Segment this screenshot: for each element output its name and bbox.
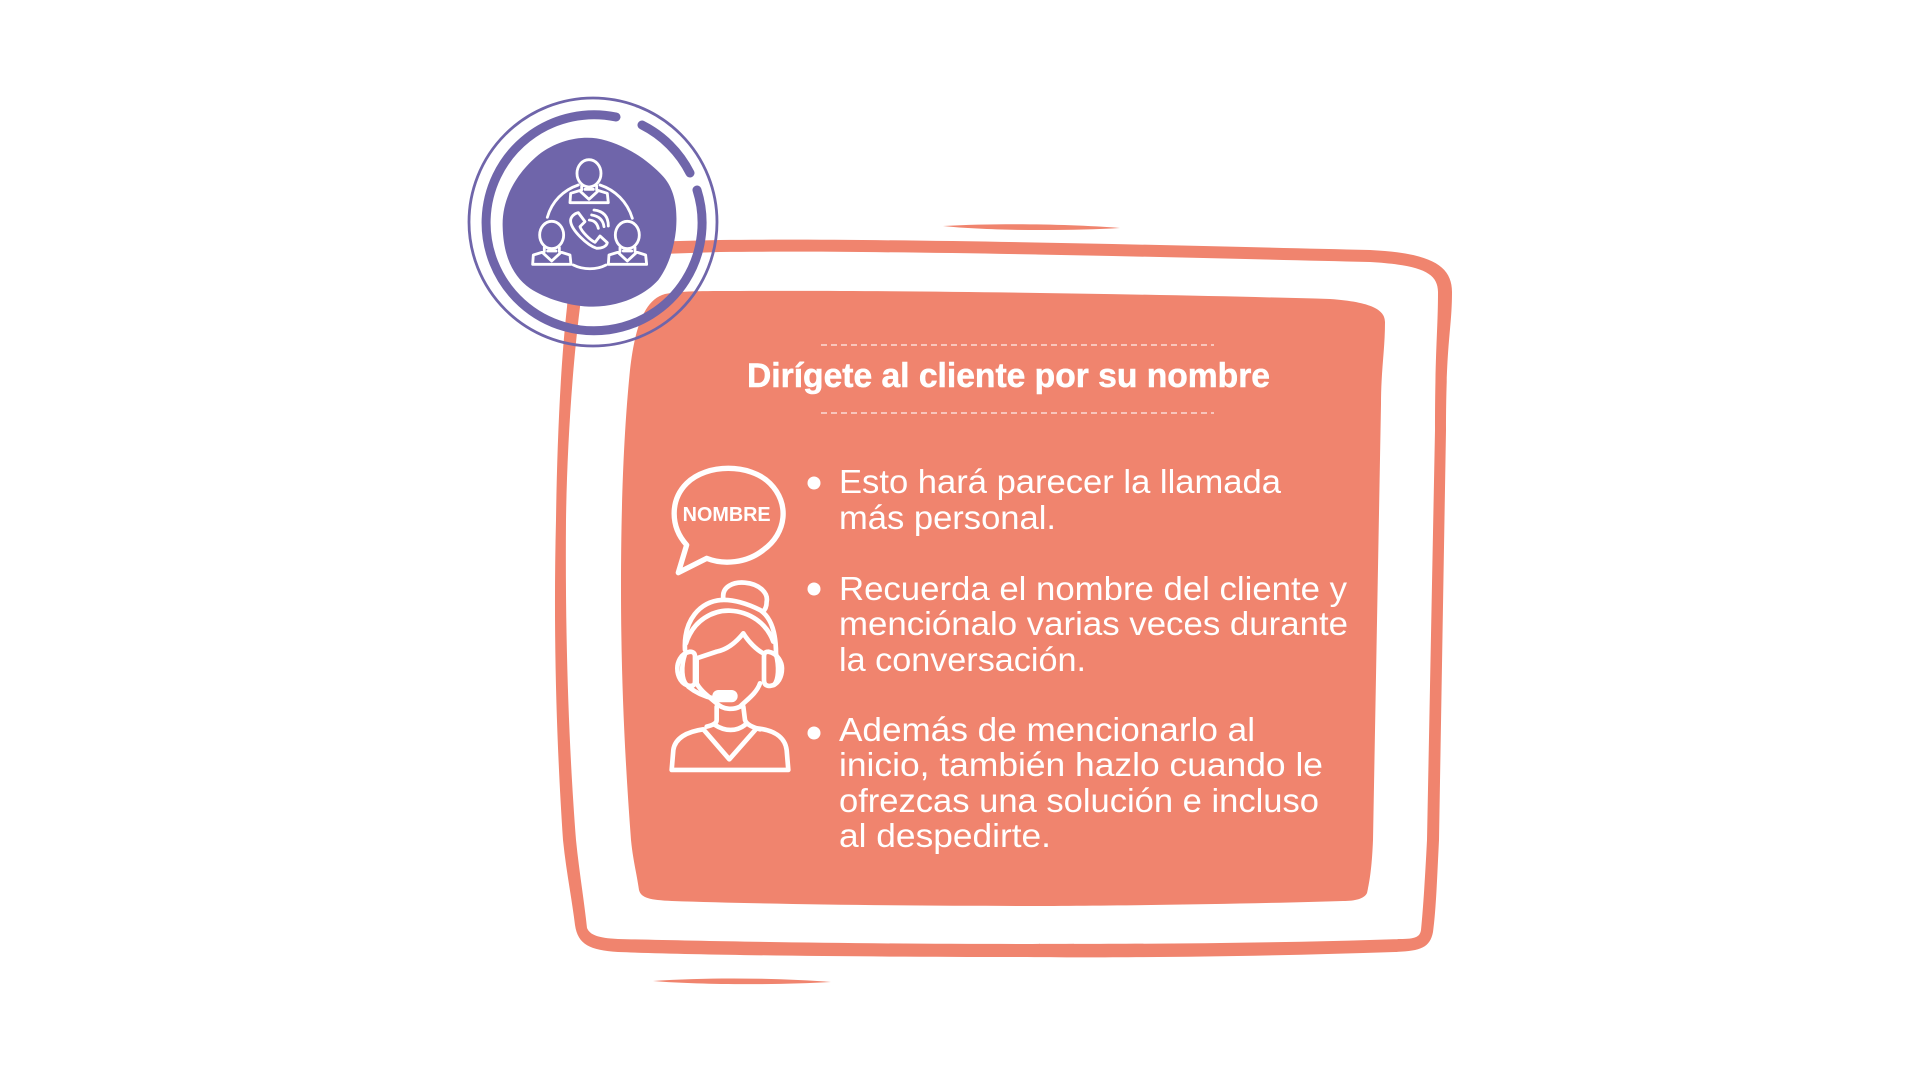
title: dashed rule above xyxy=(821,344,1214,346)
bullet item 3: ofrezcas una solución e incluso xyxy=(839,782,1319,819)
salmon content panel xyxy=(621,291,1385,906)
thick segmented ring xyxy=(486,115,702,331)
title: dashed rule below xyxy=(821,412,1214,414)
phone signal waves xyxy=(589,210,608,228)
bullet list xyxy=(808,463,1348,854)
bullet item 1 xyxy=(808,463,1282,536)
title: Dirígete al cliente por su nombre xyxy=(747,357,1270,395)
bullet item 1: Esto hará parecer la llamada xyxy=(839,463,1282,500)
bullet item 2 xyxy=(808,570,1348,678)
bullet item 3 xyxy=(808,711,1323,854)
bullet item 3: al despedirte. xyxy=(839,817,1051,854)
icon: speech bubble with name xyxy=(674,468,783,573)
bullet item 3: inicio, también hazlo cuando le xyxy=(839,746,1323,783)
connecting arcs xyxy=(547,185,578,217)
badge: circular rings with team call icon xyxy=(469,98,717,346)
icon: speech bubble with name: NOMBRE xyxy=(683,503,771,526)
person top xyxy=(570,160,608,203)
icon: call center agent with headset xyxy=(672,583,788,770)
phone handset xyxy=(571,213,607,248)
bullet item 3: Además de mencionarlo al xyxy=(839,711,1255,748)
person left xyxy=(533,221,571,264)
bullet item 2: menciónalo varias veces durante xyxy=(839,605,1348,642)
bullet item 2: Recuerda el nombre del cliente y xyxy=(839,570,1348,607)
icon: three people connected by phone xyxy=(533,160,647,269)
bullet item 2: la conversación. xyxy=(839,641,1086,678)
purple blob xyxy=(503,138,676,307)
person right xyxy=(608,221,647,264)
top brush accent xyxy=(943,224,1120,230)
outer hand-drawn frame xyxy=(555,240,1452,957)
outer thin ring xyxy=(469,98,717,346)
bullet item 1: más personal. xyxy=(839,499,1056,536)
bottom brush accent xyxy=(653,978,831,984)
